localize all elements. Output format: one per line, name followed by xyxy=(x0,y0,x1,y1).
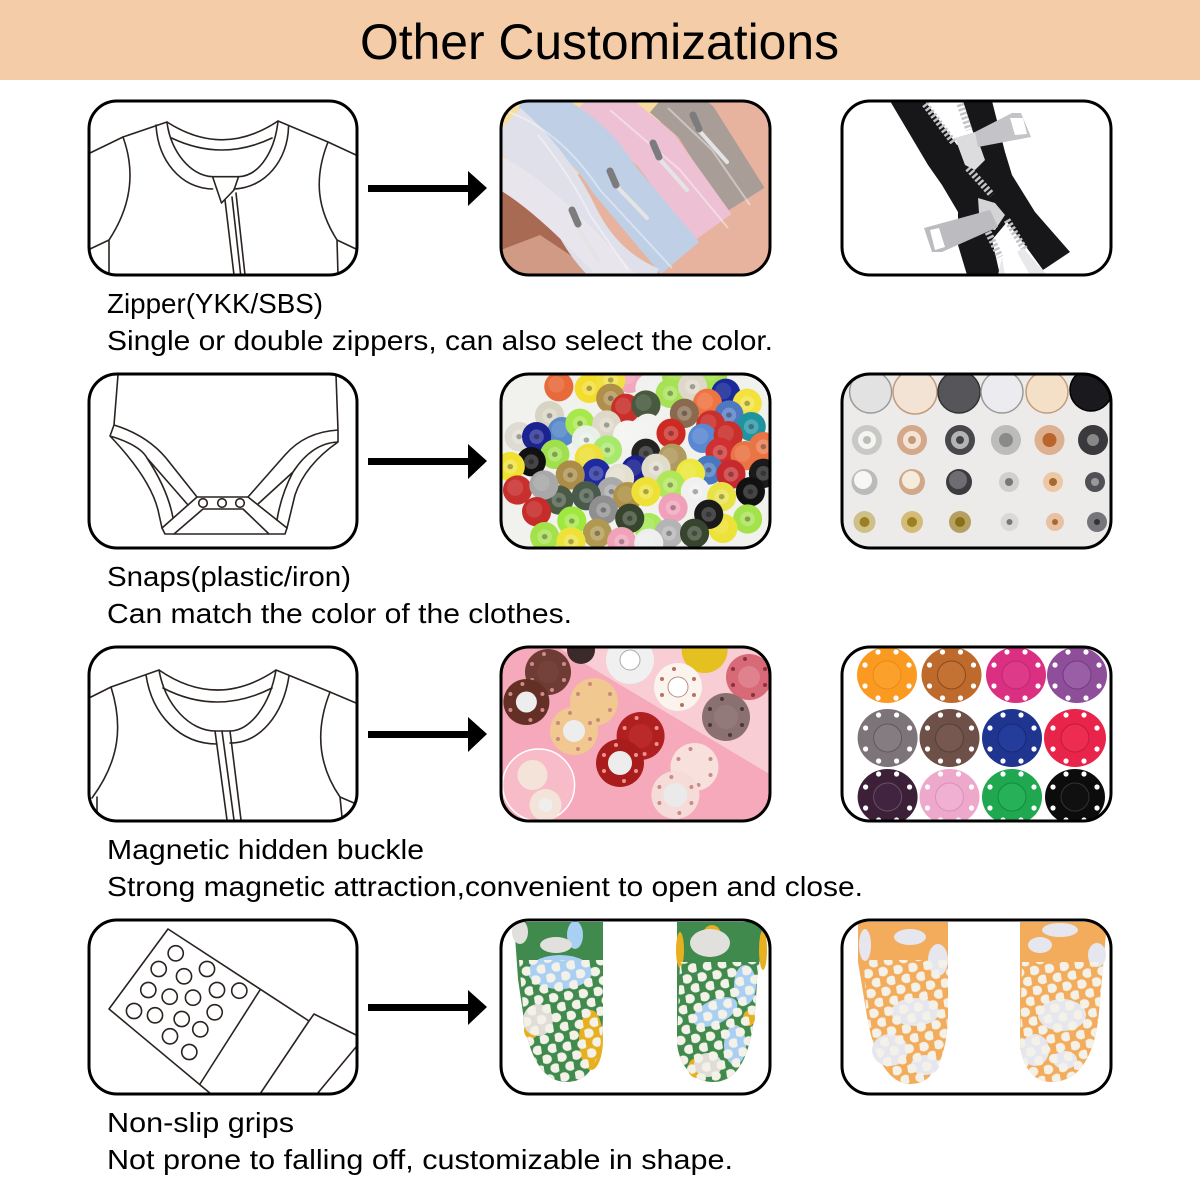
arrow xyxy=(368,444,487,479)
panel: zipper garment line drawing xyxy=(89,101,357,275)
panel: magnetic garment line drawing xyxy=(89,647,357,821)
arrow xyxy=(368,717,487,752)
title banner xyxy=(0,0,1200,80)
row label: magnetic buckle: Magnetic hidden buckle xyxy=(107,834,424,865)
photo: orange floral socks with grips xyxy=(842,920,1111,1094)
row: snaps xyxy=(89,360,1112,629)
photo: metal snaps xyxy=(842,369,1112,548)
arrow xyxy=(368,171,487,206)
photo: coloured zippers xyxy=(500,100,772,276)
row label: snaps xyxy=(107,561,572,629)
row label: zipper: Zipper(YKK/SBS) xyxy=(107,288,323,319)
row label: magnetic buckle xyxy=(107,834,863,902)
photo: plastic snaps xyxy=(500,372,772,550)
title: Other Customizations xyxy=(360,14,839,70)
row: zipper xyxy=(89,95,1111,356)
arrow xyxy=(368,990,487,1025)
photo: black metal zipper xyxy=(842,101,1111,275)
row label: non-slip grips: Non-slip grips xyxy=(107,1107,294,1138)
photo: green floral socks with grips xyxy=(501,920,770,1094)
row label: magnetic buckle: Strong magnetic attraction,convenient to open and close. xyxy=(107,871,863,902)
panel: snaps garment line drawing xyxy=(89,374,357,548)
row label: snaps: Snaps(plastic/iron) xyxy=(107,561,351,592)
photo: magnetic button colours xyxy=(842,647,1111,825)
row label: zipper xyxy=(107,288,773,356)
row label: zipper: Single or double zippers, can also select the color. xyxy=(107,325,773,356)
row label: non-slip grips: Not prone to falling off, customizable in shape. xyxy=(107,1144,733,1175)
row label: non-slip grips xyxy=(107,1107,733,1175)
panel: grips line drawing xyxy=(89,920,357,1094)
row label: snaps: Can match the color of the clothes. xyxy=(107,598,572,629)
row: non-slip grips xyxy=(89,920,1111,1175)
photo: magnetic buttons on pink xyxy=(501,627,772,821)
row: magnetic buckle xyxy=(89,627,1111,902)
